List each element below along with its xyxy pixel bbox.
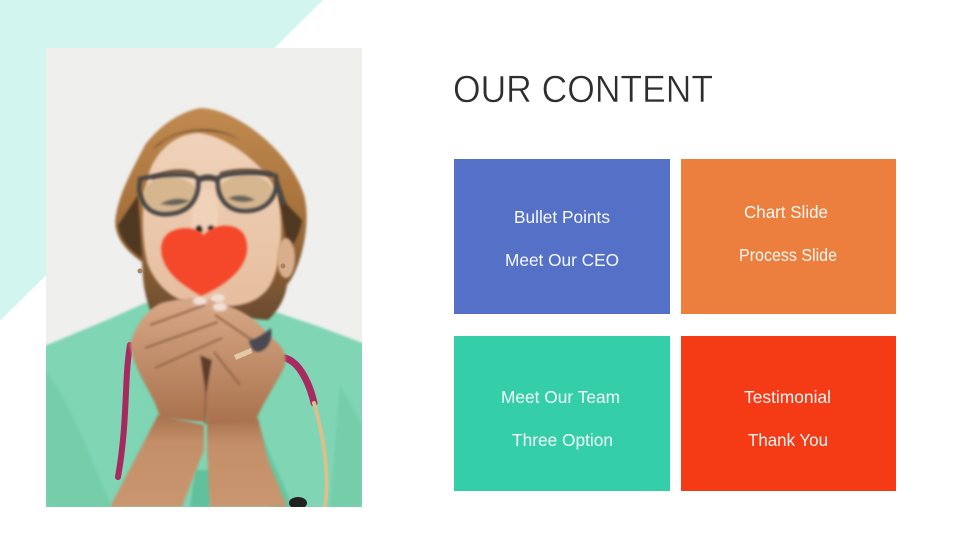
text: Bullet Points: Bullet Points	[514, 207, 610, 227]
background mint triangle	[0, 0, 323, 321]
text: Three Option: Three Option	[512, 430, 613, 450]
panel: blue card	[454, 159, 670, 314]
heading: OUR CONTENT	[453, 69, 713, 111]
hands	[130, 294, 286, 424]
face	[143, 133, 281, 306]
paper heart	[161, 226, 247, 296]
shirt	[40, 303, 368, 510]
text: Meet Our CEO: Meet Our CEO	[505, 250, 619, 270]
text: Testimonial: Testimonial	[744, 387, 831, 407]
hair	[115, 108, 307, 320]
panel: orange card	[681, 159, 896, 314]
panel: green card	[454, 336, 670, 491]
text: Process Slide: Process Slide	[739, 245, 837, 265]
panel: red card	[681, 336, 896, 491]
rings	[249, 328, 271, 352]
stethoscope	[118, 345, 327, 507]
text: Chart Slide: Chart Slide	[744, 202, 828, 222]
text: Thank You: Thank You	[748, 430, 828, 450]
glasses	[139, 173, 284, 214]
photo: woman holding paper heart	[40, 48, 368, 510]
text: Meet Our Team: Meet Our Team	[501, 387, 620, 407]
eyes and nose	[143, 168, 273, 233]
arms	[110, 415, 287, 507]
